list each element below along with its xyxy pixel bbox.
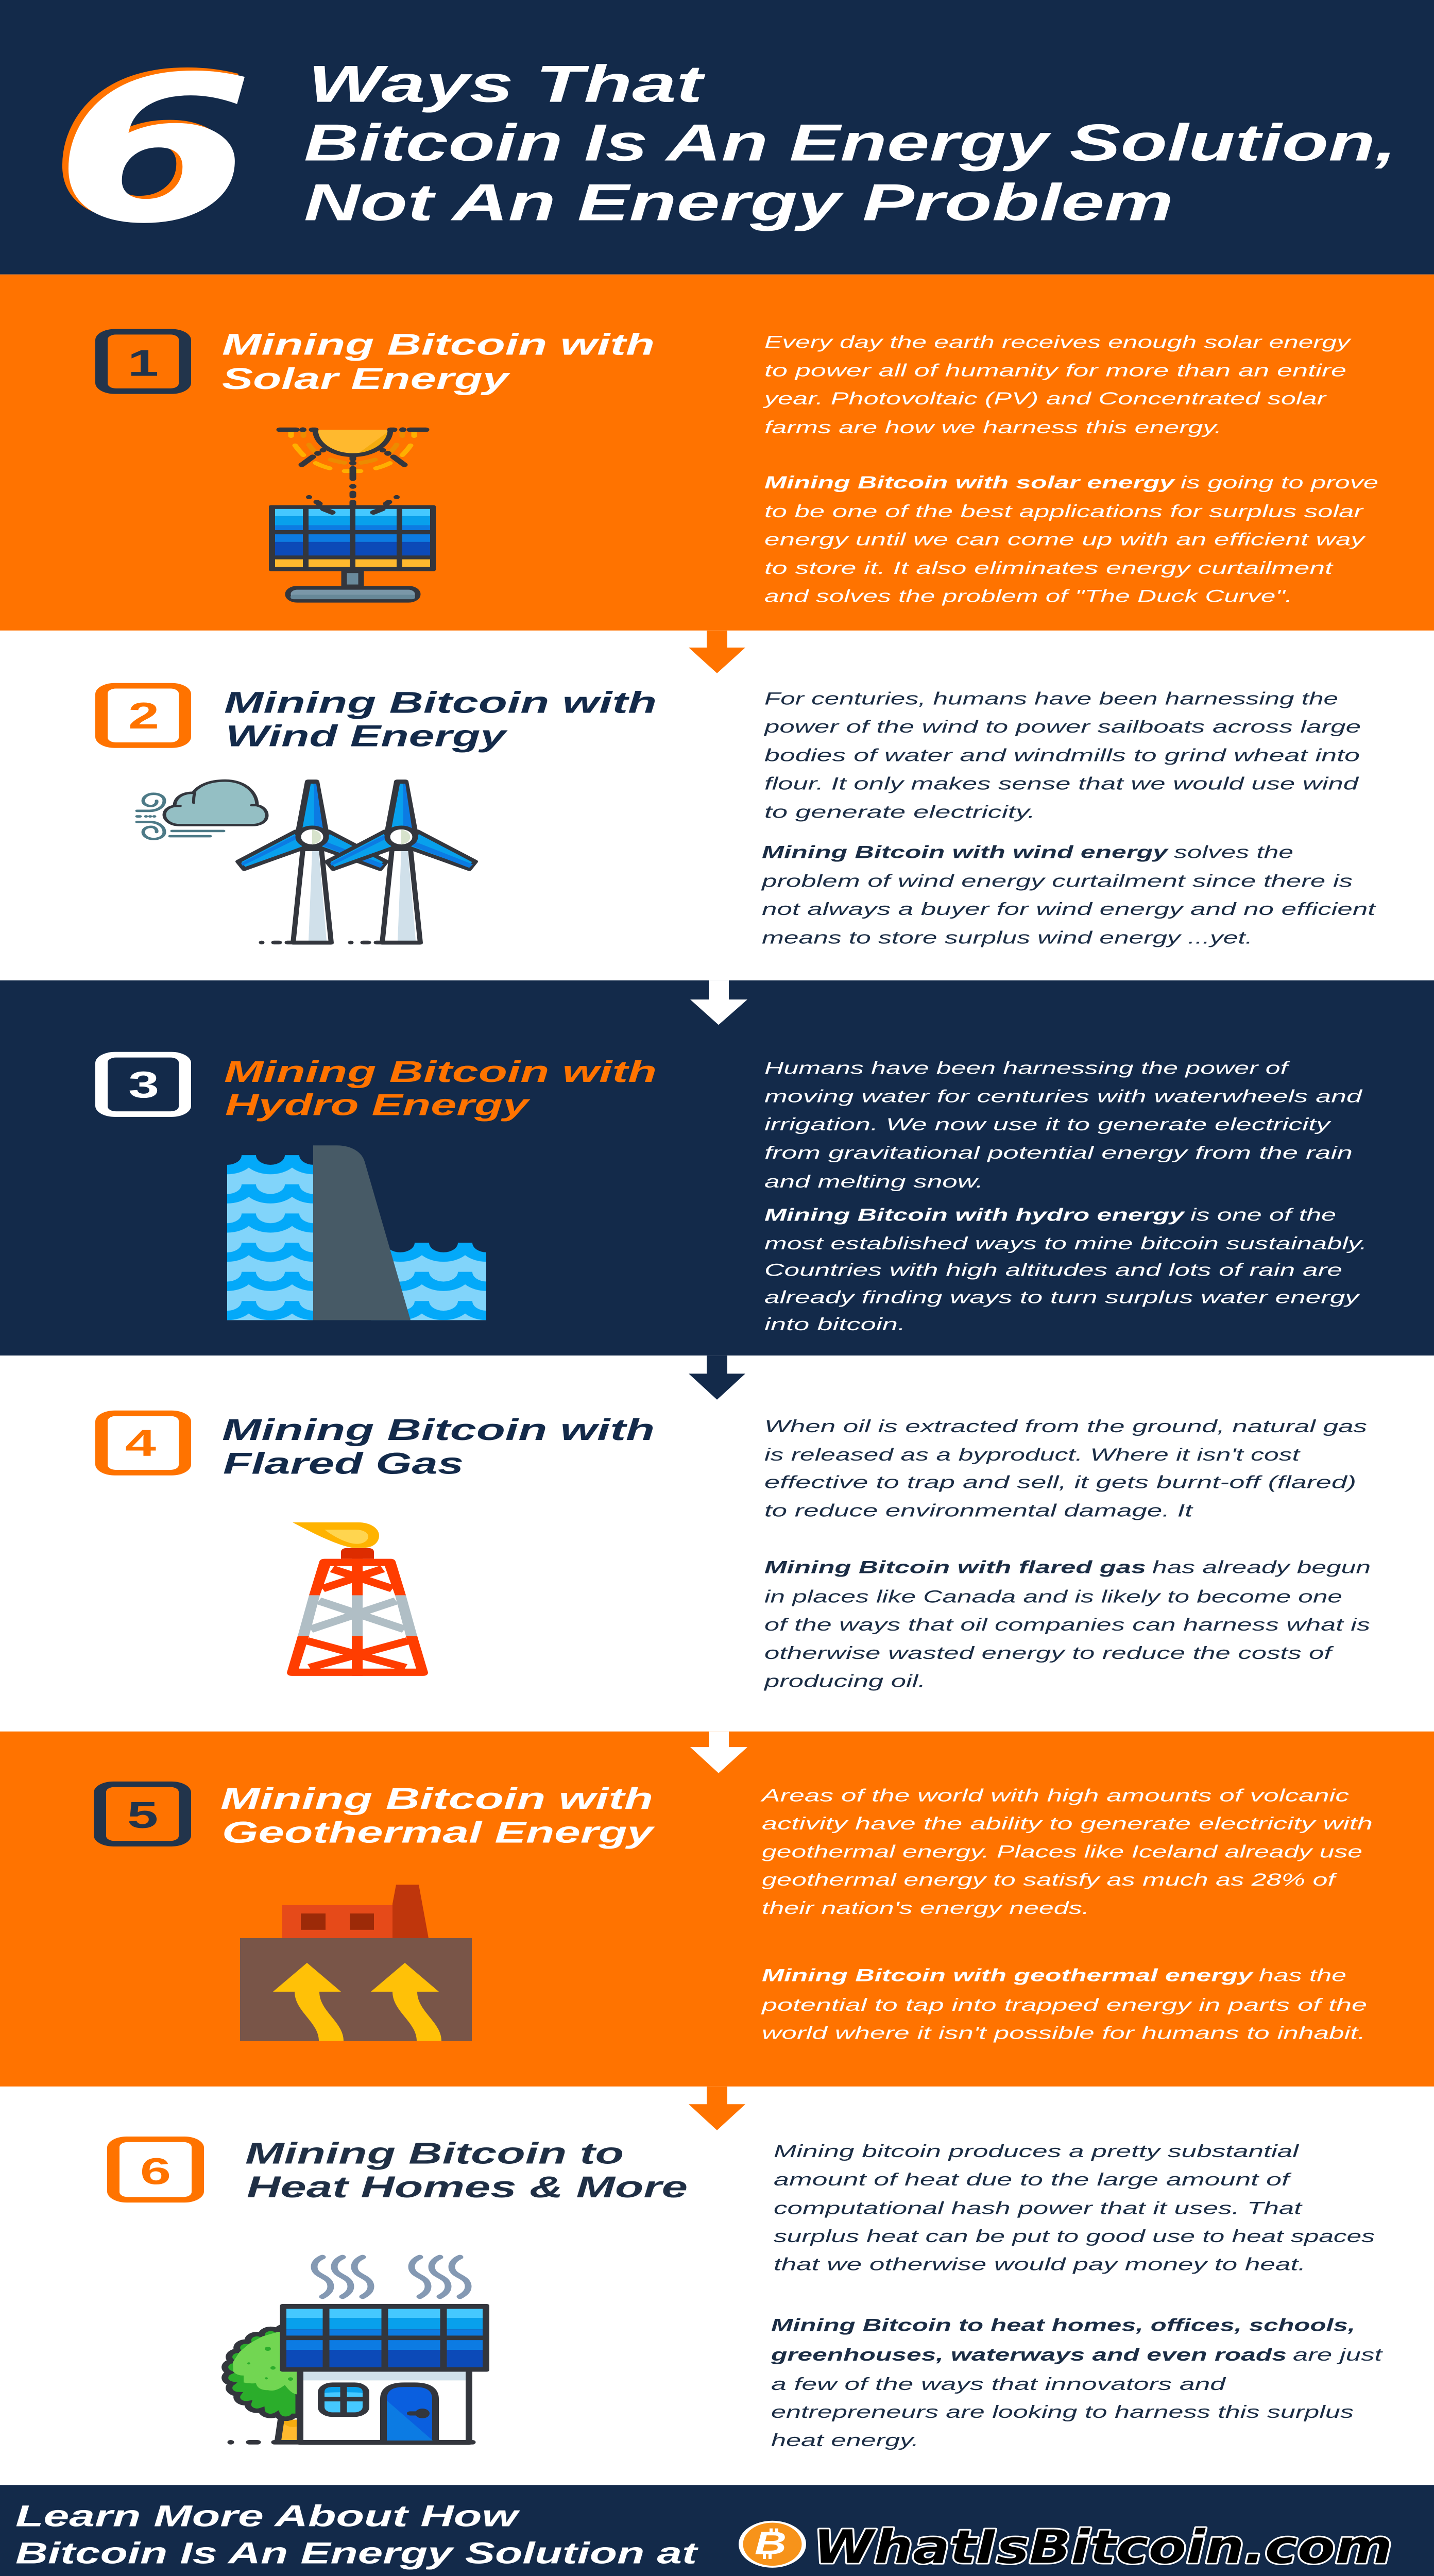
body text 4: Mining Bitcoin with flared gas — [764, 1557, 1146, 1577]
body text 5: potential to tap into trapped energy in parts of the — [761, 1995, 1367, 2015]
footer panel — [0, 2485, 1434, 2576]
footer call to action — [15, 2499, 698, 2570]
heading 3 — [224, 1055, 657, 1122]
body text 1: energy until we can come up with an efficient way — [764, 530, 1366, 550]
body text 1: Mining Bitcoin with solar energy — [764, 473, 1175, 493]
icon: rooftop solar panel — [280, 2304, 489, 2372]
body text 4: effective to trap and sell, it gets burnt-off (flared) — [764, 1473, 1356, 1493]
body text 3: from gravitational potential energy from the rain — [764, 1143, 1353, 1163]
icon: geothermal plant — [240, 1885, 472, 2041]
heading 6: Mining Bitcoin to — [245, 2137, 624, 2170]
body text 1: Every day the earth receives enough solar energy — [764, 333, 1352, 352]
body text 3: Humans have been harnessing the power of — [764, 1058, 1290, 1078]
number badge 6 — [107, 2137, 204, 2202]
icon: turbine two — [327, 782, 475, 943]
heading 4 — [222, 1413, 655, 1480]
body text 3: Countries with high altitudes and lots of rain are — [764, 1261, 1342, 1280]
number badge 2: 2 — [128, 694, 159, 737]
icon: house walls — [231, 2372, 472, 2443]
body text 4: in places like Canada and is likely to become one — [764, 1587, 1342, 1606]
body text 6: Mining bitcoin produces a pretty substantial — [774, 2142, 1300, 2161]
icon: gas flare tower — [287, 1522, 428, 1676]
body text 3: most established ways to mine bitcoin sustainably. — [764, 1234, 1367, 1253]
body text 6: computational hash power that it uses. That — [774, 2198, 1303, 2218]
panel: solar energy — [0, 275, 1434, 631]
number badge 1: 1 — [128, 342, 159, 384]
arrow 3 to 4 — [689, 1355, 745, 1400]
body text 6 — [771, 2142, 1383, 2450]
panel: geothermal energy — [0, 1732, 1434, 2087]
title: Bitcoin Is An Energy Solution, — [304, 114, 1396, 172]
number badge 2 — [95, 683, 191, 748]
number badge 5 — [94, 1782, 191, 1846]
heading 6 — [245, 2137, 688, 2204]
body text 1 — [762, 333, 1378, 606]
body text 4: has already begun — [1152, 1557, 1371, 1577]
body text 1: to be one of the best applications for surplus solar — [764, 502, 1364, 521]
body text 6: surplus heat can be put to good use to heat spaces — [774, 2227, 1375, 2246]
heading 6: Heat Homes & More — [247, 2171, 688, 2204]
body text 1: to power all of humanity for more than an entire — [764, 361, 1346, 380]
heading 1: Solar Energy — [222, 362, 510, 396]
body text 4: of the ways that oil companies can harness what is — [764, 1615, 1370, 1635]
body text 6: greenhouses, waterways and even roads — [771, 2345, 1287, 2365]
body text 2: flour. It only makes sense that we would use wind — [764, 774, 1359, 794]
icon: cloud and wind — [137, 781, 267, 839]
body text 3: moving water for centuries with waterwheels and — [764, 1087, 1363, 1106]
body text 4: otherwise wasted energy to reduce the costs of — [764, 1643, 1334, 1663]
body text 5: world where it isn't possible for humans to inhabit. — [762, 2023, 1365, 2043]
heading 5 — [220, 1782, 655, 1849]
body text 6: heat energy. — [771, 2431, 919, 2450]
body text 2: problem of wind energy curtailment since there is — [761, 871, 1353, 891]
heading 2: Wind Energy — [226, 719, 508, 753]
arrow 2 to 3 — [690, 980, 747, 1025]
body text 6: amount of heat due to the large amount of — [774, 2170, 1292, 2190]
big number 6: 6 — [48, 30, 249, 264]
icon: wind turbines and cloud — [137, 781, 475, 943]
body text 4: When oil is extracted from the ground, natural gas — [764, 1417, 1367, 1436]
icon: bitcoin coin — [739, 2521, 806, 2568]
panel: heat homes — [0, 2087, 1434, 2485]
body text 5: activity have the ability to generate electricity with — [762, 1814, 1373, 1834]
heading 1 — [222, 328, 655, 396]
icon: tree — [225, 2326, 299, 2442]
body text 1: is going to prove — [1181, 473, 1378, 493]
body text 2: solves the — [1174, 842, 1293, 862]
title — [304, 55, 1396, 232]
number badge 5: 5 — [127, 1794, 158, 1836]
body text 3: into bitcoin. — [764, 1315, 906, 1334]
body text 4: to reduce environmental damage. It — [764, 1501, 1193, 1520]
icon: turbine one — [238, 782, 386, 943]
number badge 4 — [95, 1411, 191, 1476]
panel: wind energy — [0, 631, 1434, 980]
body text 6: are just — [1293, 2345, 1383, 2365]
body text 5: their nation's energy needs. — [762, 1899, 1089, 1918]
body text 4: is released as a byproduct. Where it isn't cost — [764, 1445, 1301, 1465]
icon: steam — [314, 2257, 468, 2297]
body text 3: Mining Bitcoin with hydro energy — [764, 1205, 1185, 1225]
body text 5: Mining Bitcoin with geothermal energy — [762, 1966, 1254, 1985]
number badge 3 — [95, 1052, 191, 1117]
body text 2 — [761, 689, 1376, 947]
body text 1: farms are how we harness this energy. — [764, 418, 1222, 437]
icon: window — [321, 2384, 366, 2415]
icon: sun and solar panel — [269, 427, 436, 601]
number badge 4: 4 — [125, 1422, 156, 1464]
body text 3 — [764, 1058, 1367, 1334]
body text 5: geothermal energy to satisfy as much as 28% of — [762, 1870, 1338, 1890]
heading 5: Mining Bitcoin with — [220, 1782, 653, 1816]
body text 5 — [760, 1786, 1373, 2043]
panel: hydro energy — [0, 980, 1434, 1355]
body text 6: entrepreneurs are looking to harness this surplus — [771, 2402, 1354, 2422]
heading 4: Mining Bitcoin with — [222, 1413, 655, 1447]
number badge 6: 6 — [140, 2150, 171, 2192]
body text 2: to generate electricity. — [764, 802, 1035, 822]
panel: flared gas — [0, 1355, 1434, 1732]
body text 4: producing oil. — [763, 1671, 926, 1691]
icon: hydro dam — [227, 1145, 486, 1320]
arrow 4 to 5 — [690, 1732, 747, 1773]
body text 6: that we otherwise would pay money to heat. — [774, 2255, 1306, 2275]
number badge 1 — [95, 329, 191, 394]
heading 3: Mining Bitcoin with — [224, 1055, 657, 1088]
body text 5: Areas of the world with high amounts of volcanic — [760, 1786, 1349, 1805]
heading 4: Flared Gas — [223, 1447, 464, 1480]
header panel — [0, 0, 1434, 275]
heading 2 — [224, 686, 657, 753]
body text 6: a few of the ways that innovators and — [771, 2375, 1226, 2394]
body text 2: not always a buyer for wind energy and no efficient — [762, 900, 1376, 919]
body text 2: For centuries, humans have been harnessing the — [764, 689, 1338, 708]
heading 2: Mining Bitcoin with — [224, 686, 657, 719]
heading 5: Geothermal Energy — [222, 1816, 655, 1849]
arrow 1 to 2 — [689, 631, 745, 673]
heading 1: Mining Bitcoin with — [222, 328, 655, 361]
body text 3: already finding ways to turn surplus water energy — [764, 1287, 1360, 1307]
heading 3: Hydro Energy — [225, 1088, 531, 1122]
big number 6: 6 — [54, 33, 255, 267]
body text 5: geothermal energy. Places like Iceland already use — [762, 1842, 1362, 1861]
icon: bitcoin coin: B — [755, 2525, 787, 2561]
icon: door — [383, 2385, 436, 2442]
arrow 5 to 6 — [689, 2087, 745, 2130]
body text 1: to store it. It also eliminates energy curtailment — [764, 558, 1334, 578]
number badge 3: 3 — [128, 1064, 159, 1106]
footer call to action: Bitcoin Is An Energy Solution at — [15, 2537, 698, 2570]
body text 2: Mining Bitcoin with wind energy — [762, 842, 1169, 862]
solar panel — [269, 505, 436, 601]
body text 2: means to store surplus wind energy ...yet. — [762, 928, 1253, 947]
body text 5: has the — [1259, 1966, 1346, 1985]
body text 2: power of the wind to power sailboats across large — [763, 717, 1361, 737]
title: Not An Energy Problem — [304, 174, 1173, 232]
body text 2: bodies of water and windmills to grind wheat into — [764, 745, 1360, 765]
body text 1: year. Photovoltaic (PV) and Concentrated solar — [762, 389, 1327, 409]
body text 3: irrigation. We now use it to generate electricity — [764, 1115, 1331, 1134]
body text 1: and solves the problem of "The Duck Curve". — [764, 587, 1292, 606]
body text 3: is one of the — [1190, 1205, 1336, 1225]
title: Ways That — [308, 55, 705, 113]
icon: heated house with solar roof — [225, 2257, 489, 2443]
body text 4 — [763, 1417, 1371, 1691]
body text 6: Mining Bitcoin to heat homes, offices, schools, — [771, 2316, 1355, 2335]
footer call to action: Learn More About How — [15, 2499, 520, 2533]
body text 3: and melting snow. — [764, 1172, 983, 1192]
